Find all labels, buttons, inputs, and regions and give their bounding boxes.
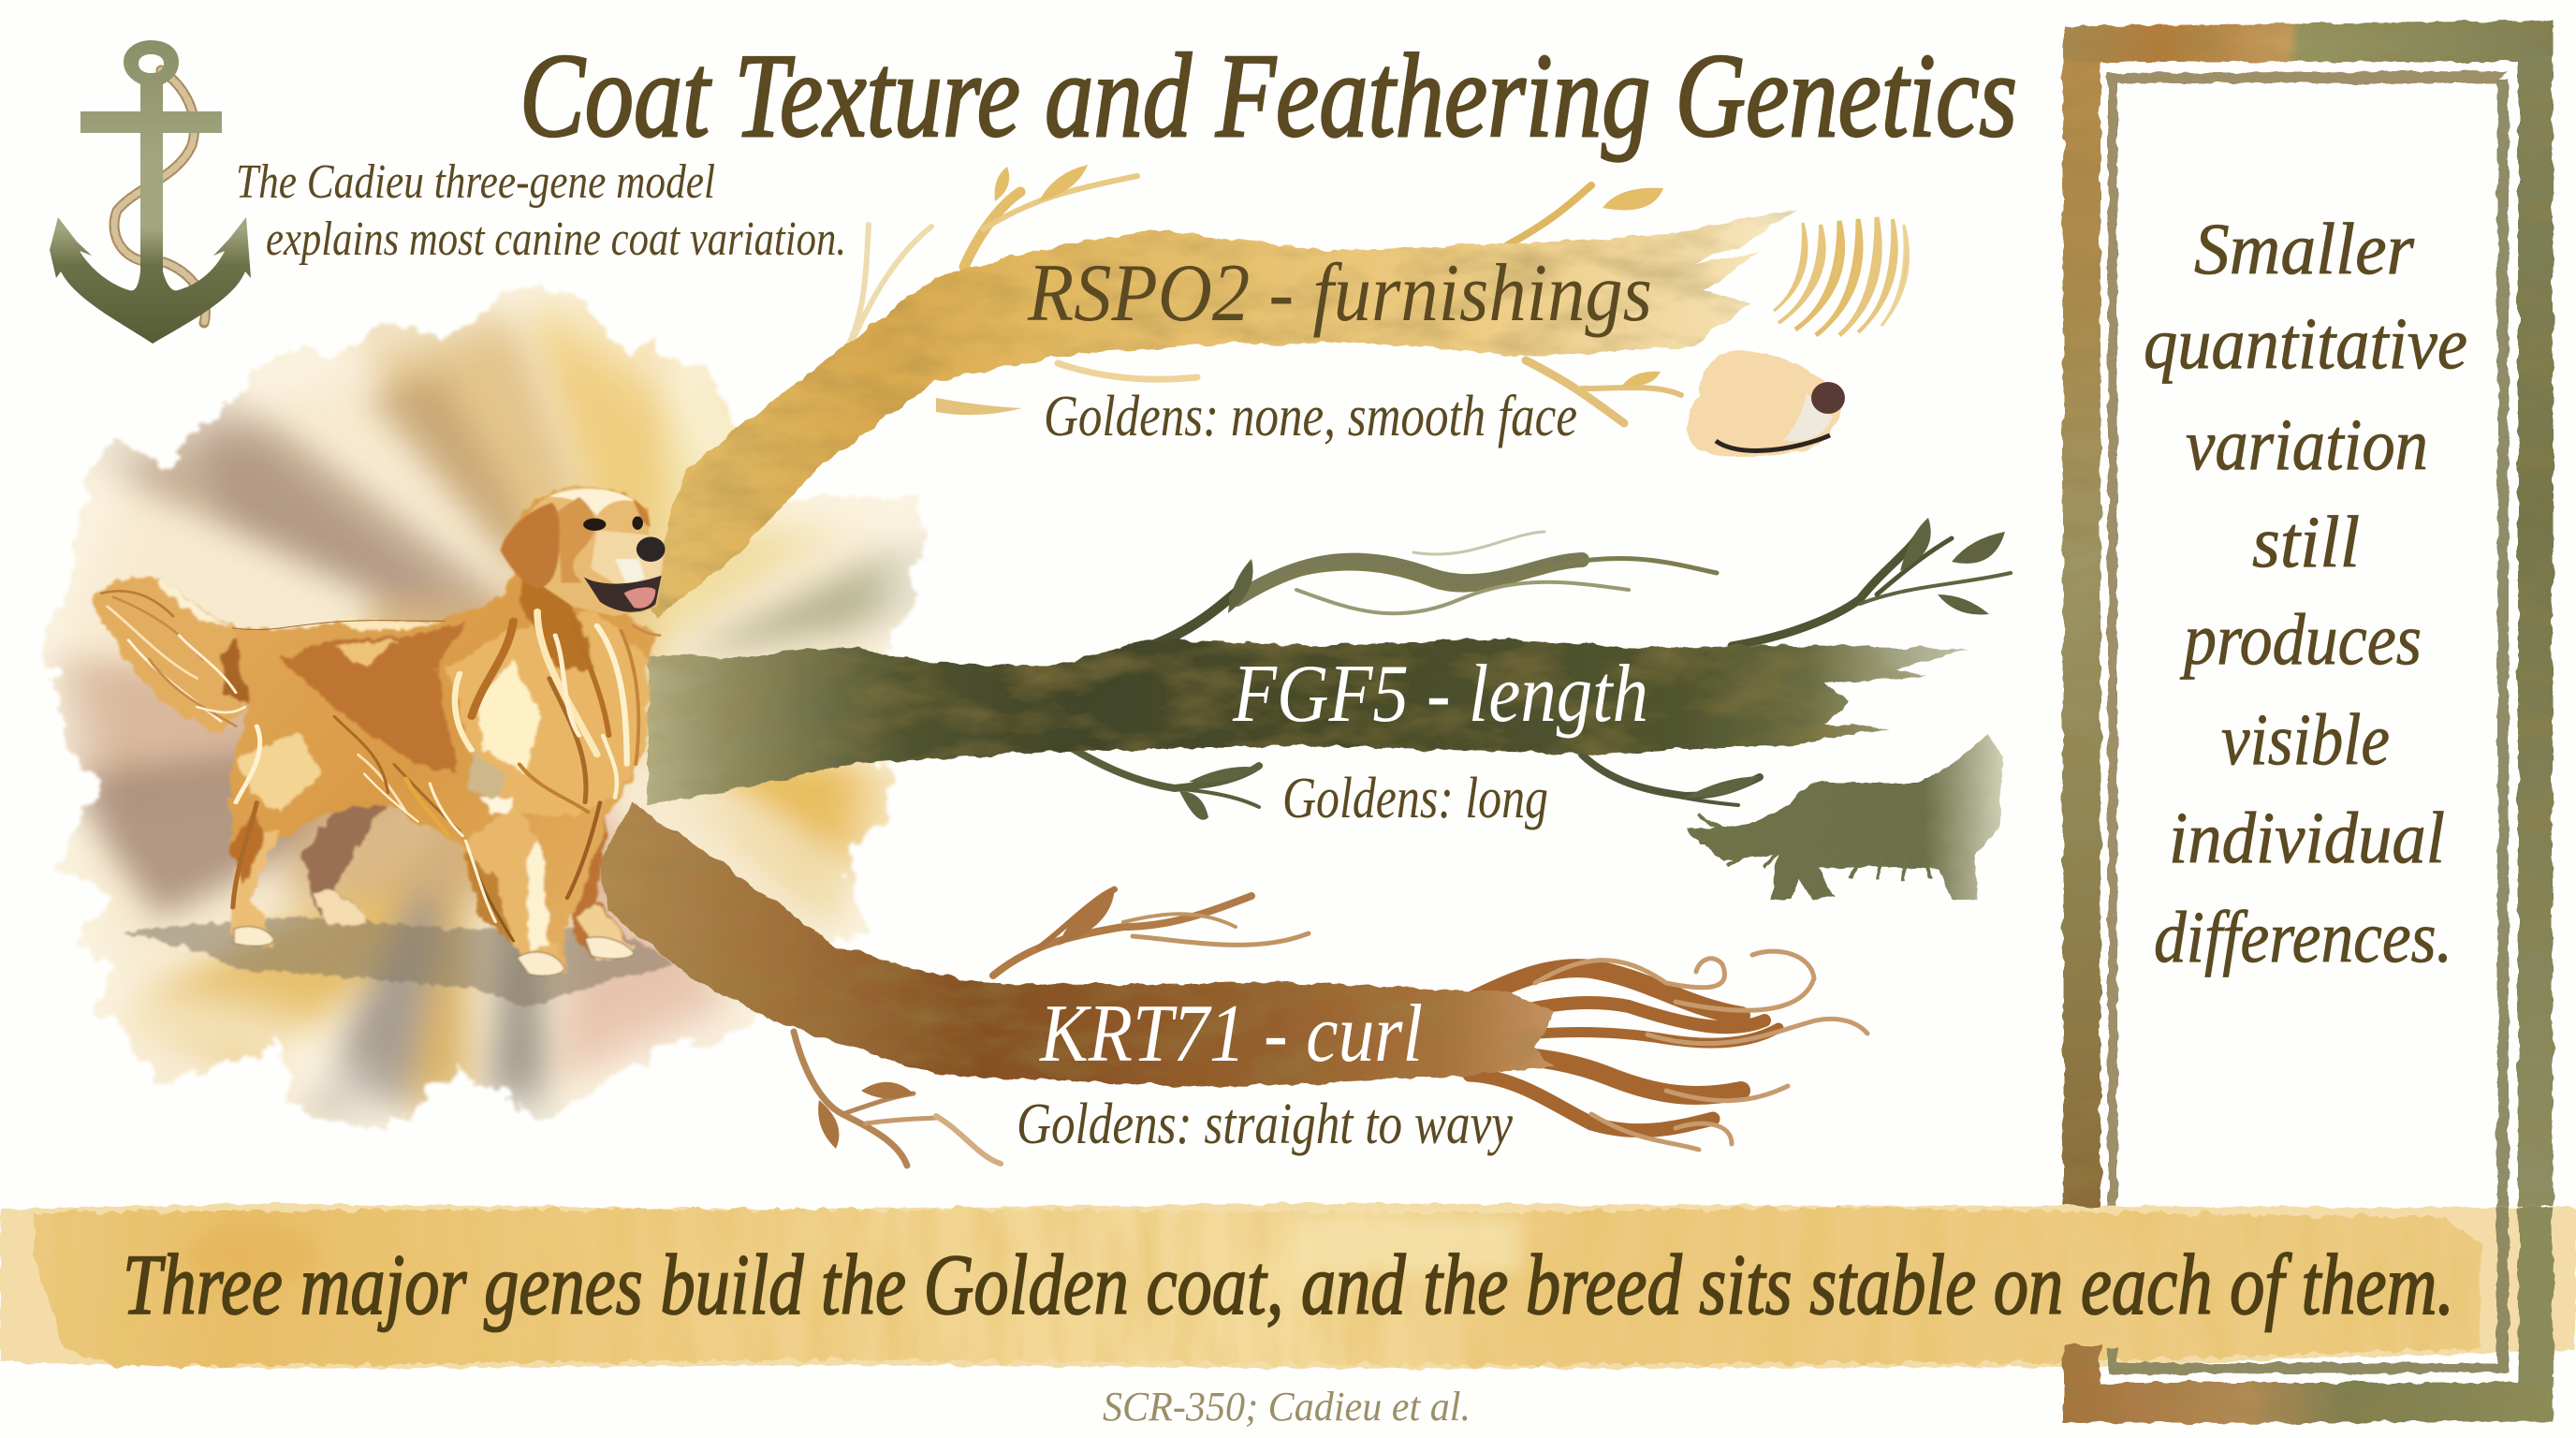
ear [500, 503, 560, 589]
frame lower part [2063, 1208, 2554, 1423]
mouth and tongue [584, 576, 662, 612]
line: visible [2221, 698, 2390, 780]
line: still [2252, 501, 2360, 582]
line: individual [2169, 797, 2445, 878]
trunk: FGF5 green branch [648, 518, 2011, 820]
line: variation [2186, 404, 2428, 485]
trunk: RSPO2 gold branch [646, 165, 1799, 618]
gold twigs [847, 176, 1681, 423]
side panel text [2144, 208, 2467, 977]
nose [637, 536, 666, 562]
trunk: KRT71 brown branch [599, 802, 1867, 1166]
green twigs and hair strands [1058, 529, 2011, 807]
foreleg [465, 807, 564, 975]
citation: SCR-350; Cadieu et al. [1103, 1384, 1471, 1430]
fur strokes [101, 591, 660, 941]
label: KRT71: KRT71 - curl [1038, 989, 1423, 1079]
icon: face furnishing tuft [1774, 217, 1909, 335]
rope [114, 70, 205, 323]
chest and mane [447, 611, 648, 816]
anchor shape [50, 40, 251, 344]
icon: long coat dog silhouette [1688, 735, 2003, 900]
subtitle line 2: explains most canine coat variation. [266, 213, 846, 266]
line: produces [2180, 598, 2422, 680]
banner wash patches [187, 1222, 318, 1287]
label: RSPO2: RSPO2 - furnishings [1027, 248, 1652, 339]
gene labels [1017, 248, 1652, 1156]
head [500, 487, 664, 616]
icon: anchor with rope [50, 40, 251, 344]
note: KRT71: Goldens: straight to wavy [1017, 1093, 1513, 1156]
brown twigs and curled strands [794, 889, 1867, 1166]
bottom banner [0, 1203, 2576, 1369]
note: RSPO2: Goldens: none, smooth face [1044, 385, 1577, 448]
subtitle [236, 155, 846, 266]
subtitle line 1: The Cadieu three-gene model [236, 155, 715, 209]
watercolor splash behind dog [41, 283, 929, 1131]
tail [91, 577, 281, 733]
far hind leg [304, 788, 388, 926]
title: Coat Texture and Feathering Genetics [520, 29, 2017, 162]
saddle shading [281, 621, 465, 774]
note: FGF5: Goldens: long [1282, 767, 1548, 830]
ground shadow [120, 917, 675, 1008]
line: Smaller [2194, 208, 2415, 289]
line: quantitative [2144, 302, 2467, 384]
far fore leg [549, 812, 634, 959]
label: FGF5: FGF5 - length [1232, 649, 1648, 740]
paws [234, 927, 634, 976]
line: differences. [2154, 896, 2452, 977]
eyes [583, 519, 606, 531]
frame upper part [2063, 21, 2553, 1208]
dog body silhouette [230, 486, 664, 975]
golden retriever illustration [91, 486, 675, 1008]
icon: smooth muzzle [1687, 351, 1845, 458]
hind leg light patches [236, 731, 319, 812]
